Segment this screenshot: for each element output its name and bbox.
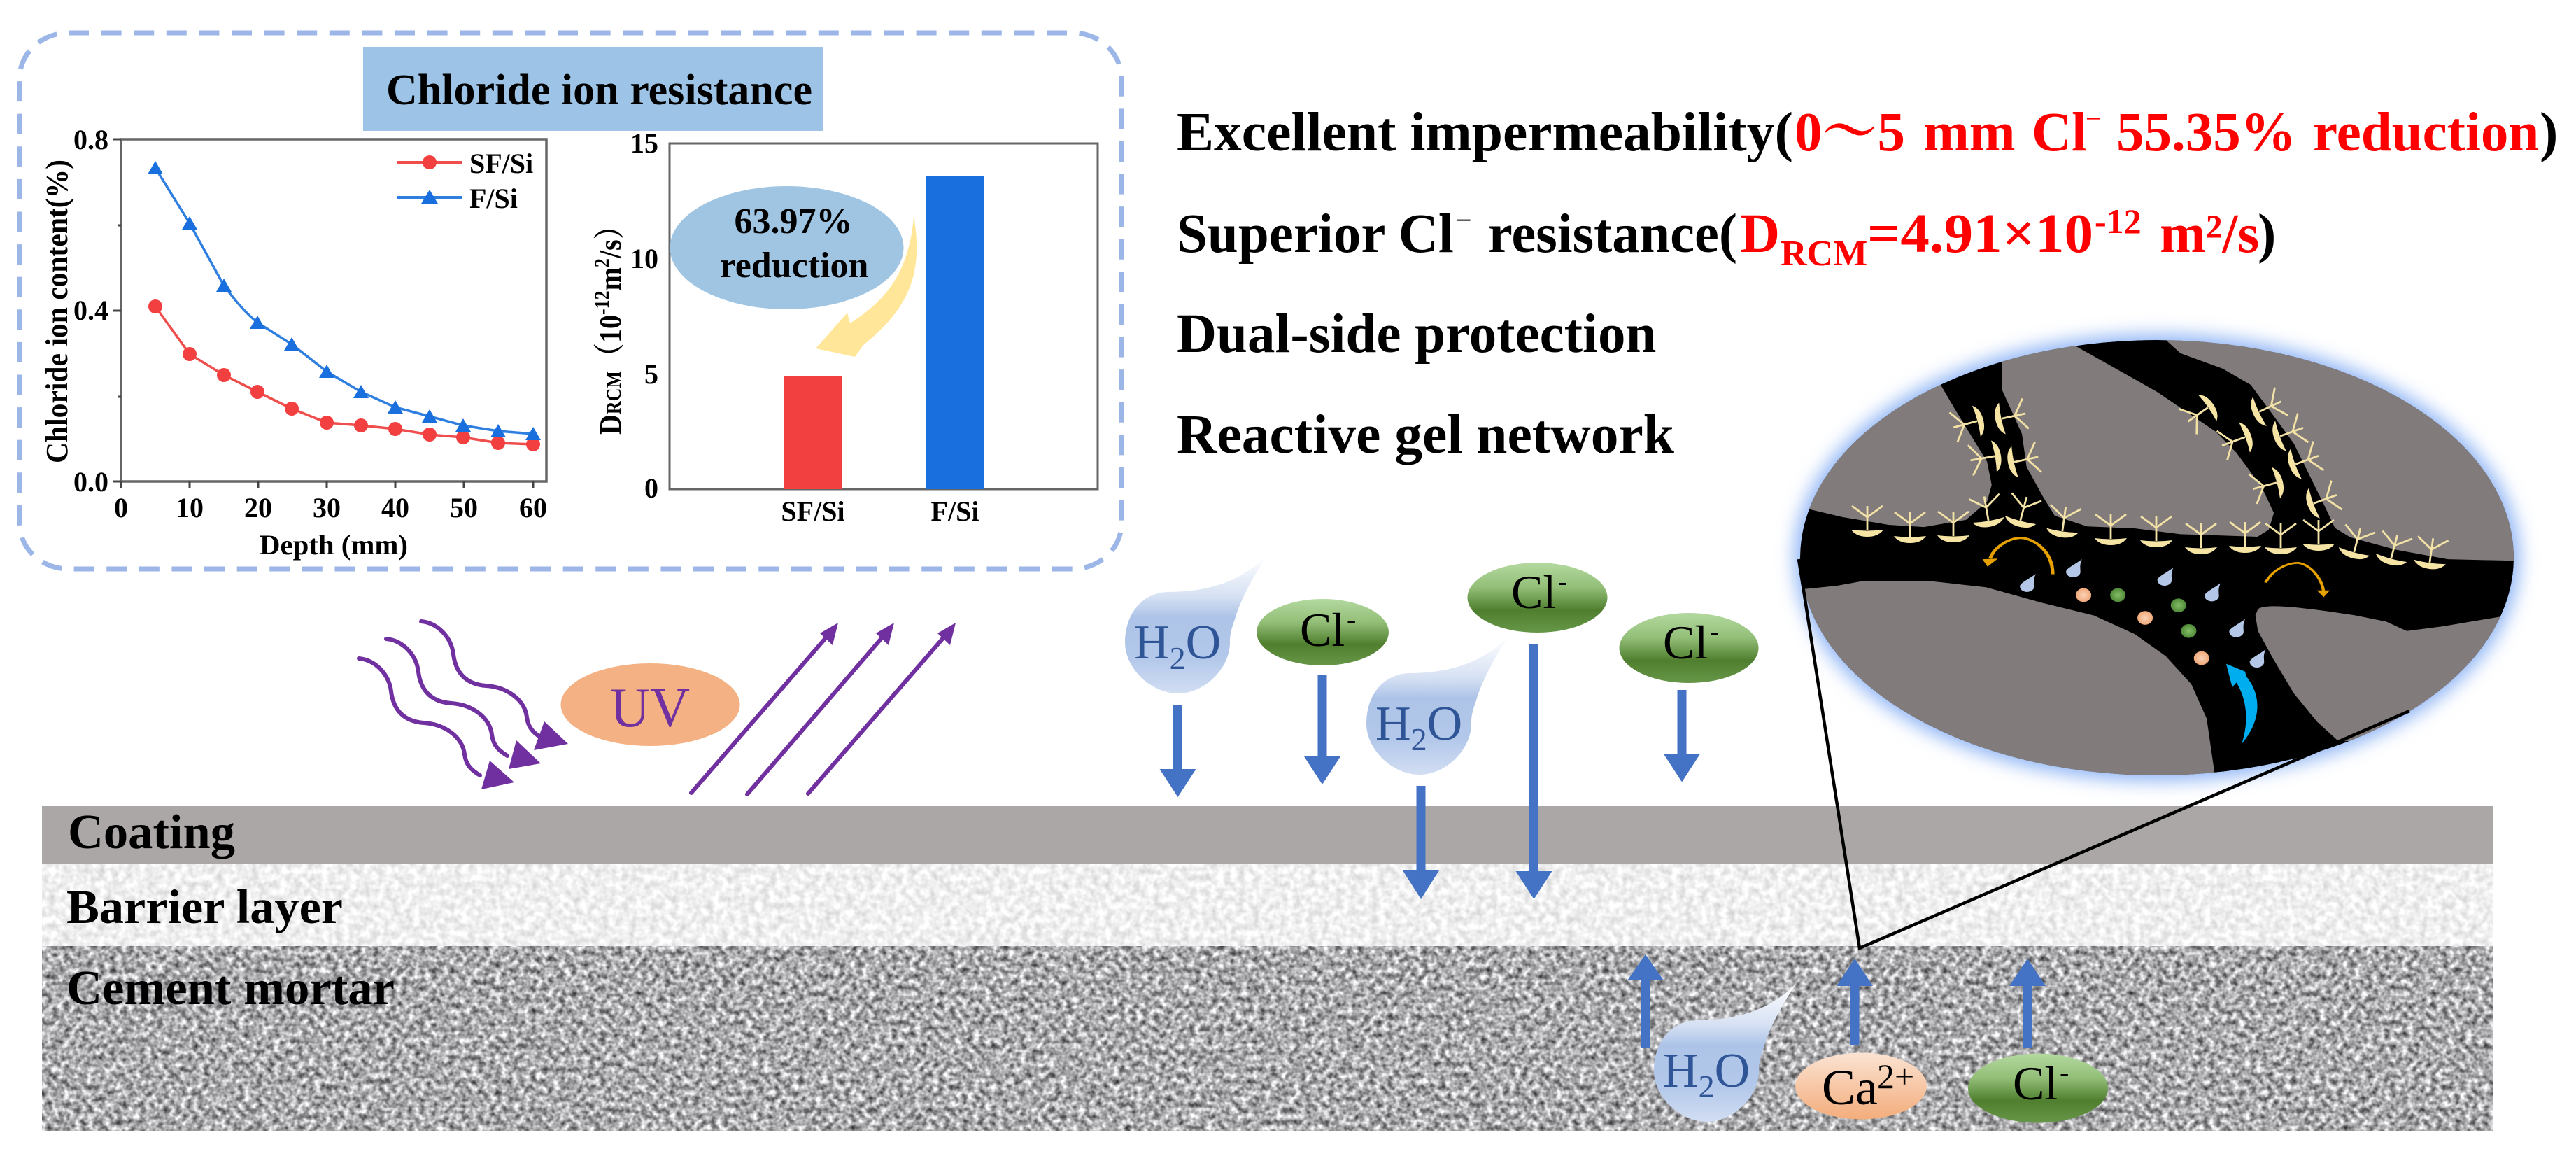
label: coating: Coating — [68, 805, 235, 859]
water drop 1 — [1125, 555, 1268, 693]
text: superior Cl- resistance: Superior Cl — [1177, 204, 1454, 265]
water drop 1: 2 — [1170, 640, 1186, 676]
text: excellent impermeability: 55.35% — [2116, 102, 2296, 163]
water drop 3 — [1654, 983, 1797, 1122]
chloride ion 3: Cl — [1663, 616, 1708, 669]
straight arrows: reflected UV — [691, 623, 956, 794]
calcium ion: Ca — [1822, 1059, 1878, 1115]
water drop 2: O — [1427, 697, 1462, 751]
layer: cement mortar — [42, 946, 2493, 1131]
line chart: chloride content vs depth: Chloride ion content(%) — [40, 160, 74, 463]
bar chart: DRCM: 15 — [630, 127, 658, 159]
label: barrier layer: Barrier layer — [66, 880, 343, 933]
panel heading: Chloride ion resistance — [386, 66, 812, 114]
line chart: chloride content vs depth: 30 — [313, 492, 341, 523]
line chart: chloride content vs depth: 0.0 — [73, 466, 108, 498]
chloride ion 3 — [1619, 613, 1759, 683]
bar chart: DRCM: /s — [593, 239, 628, 259]
chart legend: F/Si — [469, 183, 518, 214]
UV source: UV — [610, 677, 690, 739]
text: superior Cl- resistance: ) — [2258, 204, 2276, 265]
bar chart: DRCM: 10 — [630, 243, 658, 274]
chloride ion 1 — [1257, 599, 1389, 665]
chloride ion 2 — [1468, 563, 1608, 633]
bar chart: DRCM: F/Si — [931, 495, 979, 527]
arrow: reduction — [816, 216, 917, 357]
water drop 3: O — [1715, 1044, 1750, 1098]
chloride ion 2: - — [1558, 565, 1567, 597]
arrow: left orange arc — [1983, 538, 2053, 575]
text: superior Cl- resistance: -12 — [2095, 202, 2142, 241]
water drop 1: O — [1186, 616, 1221, 670]
chloride ion 4: Cl — [2013, 1057, 2058, 1110]
line chart: chloride content vs depth: 50 — [450, 492, 478, 523]
line chart: chloride content vs depth: 0 — [114, 492, 128, 523]
chloride ions in pore — [2110, 588, 2196, 638]
panel: chloride ion resistance — [20, 33, 1121, 569]
text: excellent impermeability: 0～5 — [1795, 102, 1905, 163]
panel heading — [363, 47, 823, 131]
water drop 3: 2 — [1699, 1069, 1715, 1104]
line chart: chloride content vs depth: 20 — [244, 492, 272, 523]
bar chart: DRCM: m — [593, 267, 628, 290]
layer: coating — [42, 806, 2493, 864]
line chart: chloride content vs depth: 60 — [519, 492, 547, 523]
bar chart: DRCM: 5 — [644, 358, 658, 390]
arrows: upward ion ingress — [1627, 954, 2046, 1048]
chart legend — [397, 148, 533, 214]
text: excellent impermeability: Cl — [2032, 102, 2087, 163]
callout: 63.97% reduction: 63.97% — [735, 202, 852, 241]
chloride ion 4 — [1968, 1054, 2108, 1122]
line chart: chloride content vs depth: Depth (mm) — [260, 529, 408, 561]
bar chart: DRCM: 2 — [590, 258, 614, 267]
callout: 63.97% reduction — [670, 186, 917, 357]
water droplets in pore — [2020, 559, 2265, 668]
text: excellent impermeability: reduction — [2313, 102, 2539, 163]
arrow: right orange arc — [2265, 563, 2330, 598]
chloride ion 4: - — [2060, 1057, 2069, 1088]
text: superior Cl- resistance: =4.91×10 — [1867, 204, 2093, 265]
chloride ion 2: Cl — [1511, 565, 1556, 619]
gel grafts on pore walls — [1851, 387, 2449, 571]
magnified pore view — [1782, 322, 2532, 794]
line chart: chloride content vs depth: 10 — [176, 492, 204, 523]
calcium ion: 2+ — [1877, 1057, 1914, 1096]
text: dual-side protection: Dual-side protection — [1177, 304, 1656, 365]
text: reactive gel network: Reactive gel network — [1177, 404, 1674, 465]
label: cement mortar: Cement mortar — [66, 961, 395, 1015]
text: excellent impermeability: ) — [2540, 102, 2558, 163]
calcium ions in pore — [2076, 588, 2209, 665]
text: excellent impermeability: − — [2086, 103, 2102, 134]
chloride ion 1: - — [1347, 603, 1356, 635]
text: superior Cl- resistance — [1177, 202, 2276, 274]
text: superior Cl- resistance: resistance( — [1488, 204, 1737, 265]
chloride ion 1: Cl — [1300, 603, 1345, 656]
bar chart: DRCM: -12 — [590, 290, 614, 315]
line chart: chloride content vs depth — [40, 124, 547, 561]
arrow: blue upward flow — [2226, 664, 2258, 744]
bar chart: DRCM: 0 — [644, 472, 658, 504]
water drop 3: H — [1663, 1044, 1699, 1098]
text: excellent impermeability: Excellent impermeability( — [1177, 102, 1793, 163]
arrows: downward ion ingress — [1160, 644, 1700, 899]
text: superior Cl- resistance: − — [1456, 204, 1472, 236]
water drop 1: H — [1134, 616, 1170, 670]
bar chart: DRCM: ） — [593, 211, 628, 239]
layer: barrier — [42, 864, 2493, 946]
callout: 63.97% reduction: reduction — [720, 246, 868, 286]
line chart: chloride content vs depth: 40 — [381, 492, 409, 523]
line chart: chloride content vs depth: 0.8 — [73, 124, 108, 155]
zoom lines — [1799, 559, 2409, 948]
text: excellent impermeability: mm — [1923, 102, 2016, 163]
chloride ion 3: - — [1710, 616, 1719, 647]
water drop 2: 2 — [1411, 721, 1427, 757]
wavy arrows: incoming UV — [359, 621, 568, 789]
water drop 2: H — [1375, 697, 1411, 751]
UV source — [561, 663, 740, 746]
line chart: chloride content vs depth: 0.4 — [73, 295, 108, 326]
text: superior Cl- resistance: D — [1740, 204, 1780, 265]
chart legend: SF/Si — [469, 148, 533, 179]
water drop 2 — [1366, 636, 1509, 775]
text: excellent impermeability — [1177, 102, 2558, 163]
text: superior Cl- resistance: RCM — [1781, 234, 1867, 274]
text: superior Cl- resistance: m²/s — [2160, 204, 2259, 265]
calcium ion — [1795, 1052, 1927, 1120]
bar chart: DRCM: DRCM（10 — [593, 315, 628, 435]
bar chart: DRCM — [590, 127, 1098, 527]
bar chart: DRCM: SF/Si — [781, 495, 845, 527]
